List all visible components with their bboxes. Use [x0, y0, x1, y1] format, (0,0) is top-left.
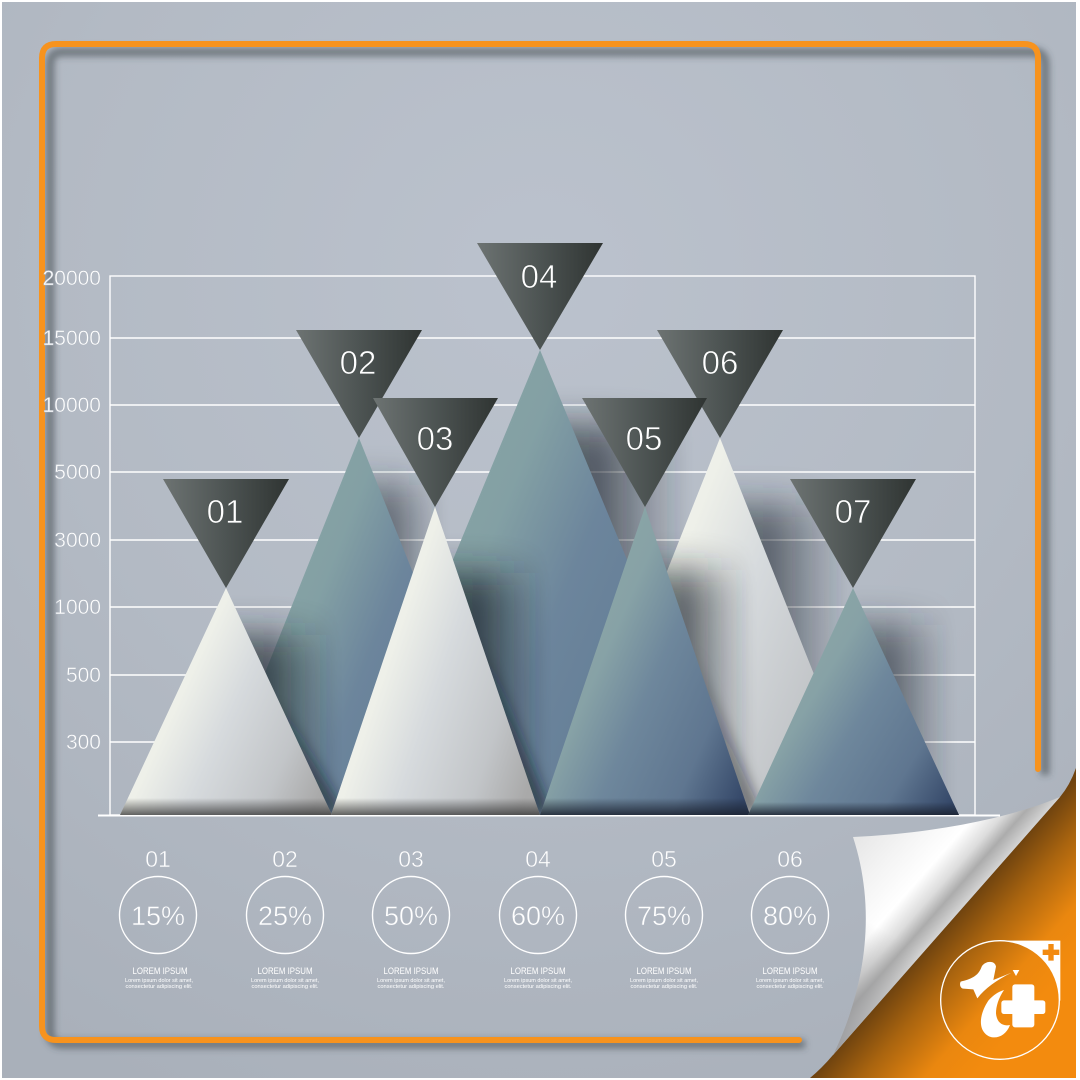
- y axis labels: 500: [66, 664, 101, 687]
- stat 03: 03: [398, 846, 424, 872]
- logo big plus: [1001, 984, 1045, 1027]
- marker 04: 04: [521, 258, 557, 295]
- stat 04: consectetur adipiscing elit.: [504, 984, 572, 990]
- rear triangles and shadows: [208, 350, 953, 833]
- y axis labels: 3000: [54, 529, 101, 552]
- page curl: orange corner: [810, 768, 1076, 1078]
- triangle 03 shadow: [448, 546, 541, 786]
- stat 06: 06: [777, 846, 803, 872]
- triangle 02 shadow: [368, 461, 440, 572]
- triangle 03: [325, 507, 545, 815]
- page curl: flap: [833, 797, 1060, 1055]
- stat 05: consectetur adipiscing elit.: [630, 984, 698, 990]
- marker 01: 01: [207, 493, 243, 530]
- marker 02: [296, 330, 422, 438]
- chart grid: [98, 276, 1000, 816]
- stat 02: [246, 846, 324, 990]
- stat 04: LOREM IPSUM: [510, 966, 566, 976]
- logo corner: [1000, 941, 1060, 1001]
- marker 07: 07: [835, 493, 871, 530]
- triangle 01: [110, 588, 340, 815]
- triangle 04 shadow: [560, 399, 684, 570]
- stat 04: 60%: [511, 901, 565, 931]
- triangle 06 body: [667, 438, 814, 812]
- stat 06: consectetur adipiscing elit.: [756, 984, 824, 990]
- triangle 01 edge shadow: [284, 712, 340, 814]
- stat 06: LOREM IPSUM: [762, 966, 818, 976]
- marker 03: 03: [417, 420, 453, 457]
- stat 05: 75%: [637, 901, 691, 931]
- marker 06: [657, 330, 783, 438]
- triangle 02 body: [266, 438, 413, 814]
- triangle 04 body: [453, 350, 627, 814]
- stat 03: LOREM IPSUM: [384, 966, 438, 976]
- stat 05: Lorem ipsum dolor sit amet,: [630, 978, 698, 984]
- stat 01: 15%: [131, 901, 185, 931]
- stat 06: 80%: [763, 901, 817, 931]
- marker 02: 02: [340, 344, 376, 381]
- stat 06: Lorem ipsum dolor sit amet,: [756, 978, 824, 984]
- stat 04: 04: [525, 846, 551, 872]
- stat 02: Lorem ipsum dolor sit amet,: [251, 978, 319, 984]
- y axis labels: 15000: [43, 327, 101, 350]
- logo ring: [941, 941, 1059, 1059]
- y axis labels: 5000: [54, 461, 101, 484]
- stat 03: Lorem ipsum dolor sit amet,: [377, 978, 445, 984]
- stat 01: LOREM IPSUM: [132, 966, 188, 976]
- triangle 05 shadow: [658, 542, 748, 799]
- stat 05: [626, 846, 702, 990]
- marker 01: [163, 479, 289, 588]
- triangle 05: [535, 507, 755, 815]
- triangle 06 shadow: [737, 480, 844, 673]
- triangle 01 shadow: [235, 606, 332, 792]
- stat 01: 01: [145, 846, 171, 872]
- stat 04: [500, 846, 576, 990]
- stat 02: 02: [272, 846, 298, 872]
- marker 04: [477, 243, 603, 350]
- stat 05: LOREM IPSUM: [636, 966, 692, 976]
- stat 03: consectetur adipiscing elit.: [378, 984, 444, 990]
- stat 02: LOREM IPSUM: [258, 966, 312, 976]
- stat 01: [120, 846, 196, 990]
- logo small plus: [1043, 944, 1059, 961]
- triangle 07: [745, 588, 965, 815]
- marker 03: [373, 398, 498, 507]
- marker 06: 06: [702, 344, 738, 381]
- marker 07: [790, 479, 916, 588]
- logo arrow: [1013, 970, 1019, 976]
- stat 03: [372, 846, 450, 990]
- logo: [941, 941, 1060, 1059]
- stat 06: [752, 846, 828, 990]
- triangle 07 shadow: [860, 600, 948, 788]
- y axis labels: 1000: [54, 596, 101, 619]
- y axis labels: 300: [66, 731, 101, 754]
- stat 04: Lorem ipsum dolor sit amet,: [504, 978, 572, 984]
- stat 03: 50%: [384, 901, 438, 931]
- stat 01: Lorem ipsum dolor sit amet,: [125, 978, 193, 984]
- y axis labels: 10000: [43, 394, 101, 417]
- triangle 05 edge shadow: [701, 671, 760, 812]
- stat 02: consectetur adipiscing elit.: [252, 984, 318, 990]
- stat 01: consectetur adipiscing elit.: [126, 984, 192, 990]
- stat 05: 05: [651, 846, 677, 872]
- y axis labels: 20000: [43, 267, 101, 290]
- marker 05: [582, 398, 707, 507]
- triangle 03 edge shadow: [488, 663, 550, 814]
- stat 02: 25%: [258, 901, 312, 931]
- y axis labels: [43, 267, 101, 754]
- marker 05: 05: [626, 420, 662, 457]
- logo t mark: [960, 962, 1012, 1037]
